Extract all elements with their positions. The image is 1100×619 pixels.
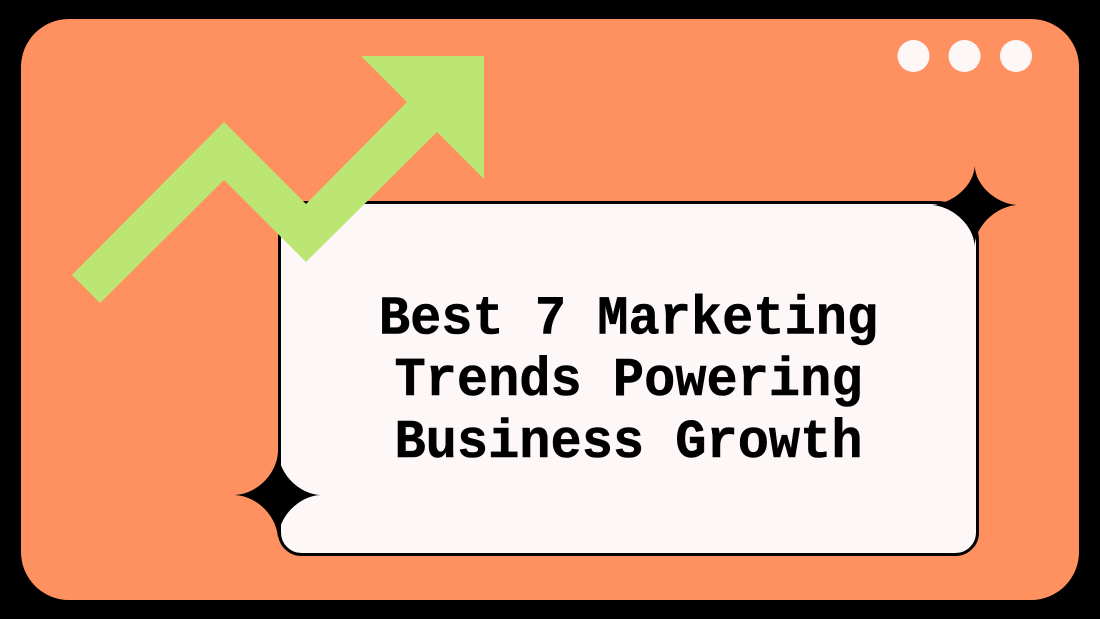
title: Best 7 Marketing	[379, 288, 878, 351]
arrow: rising growth trend	[72, 56, 484, 303]
window control dots	[898, 40, 1032, 72]
panel: title card	[279, 202, 978, 555]
icon: sparkle top right	[932, 166, 1018, 246]
icon: sparkle bottom left	[234, 452, 320, 538]
title: Trends Powering	[394, 350, 863, 412]
title: Business Growth	[394, 412, 863, 474]
title	[379, 288, 878, 474]
